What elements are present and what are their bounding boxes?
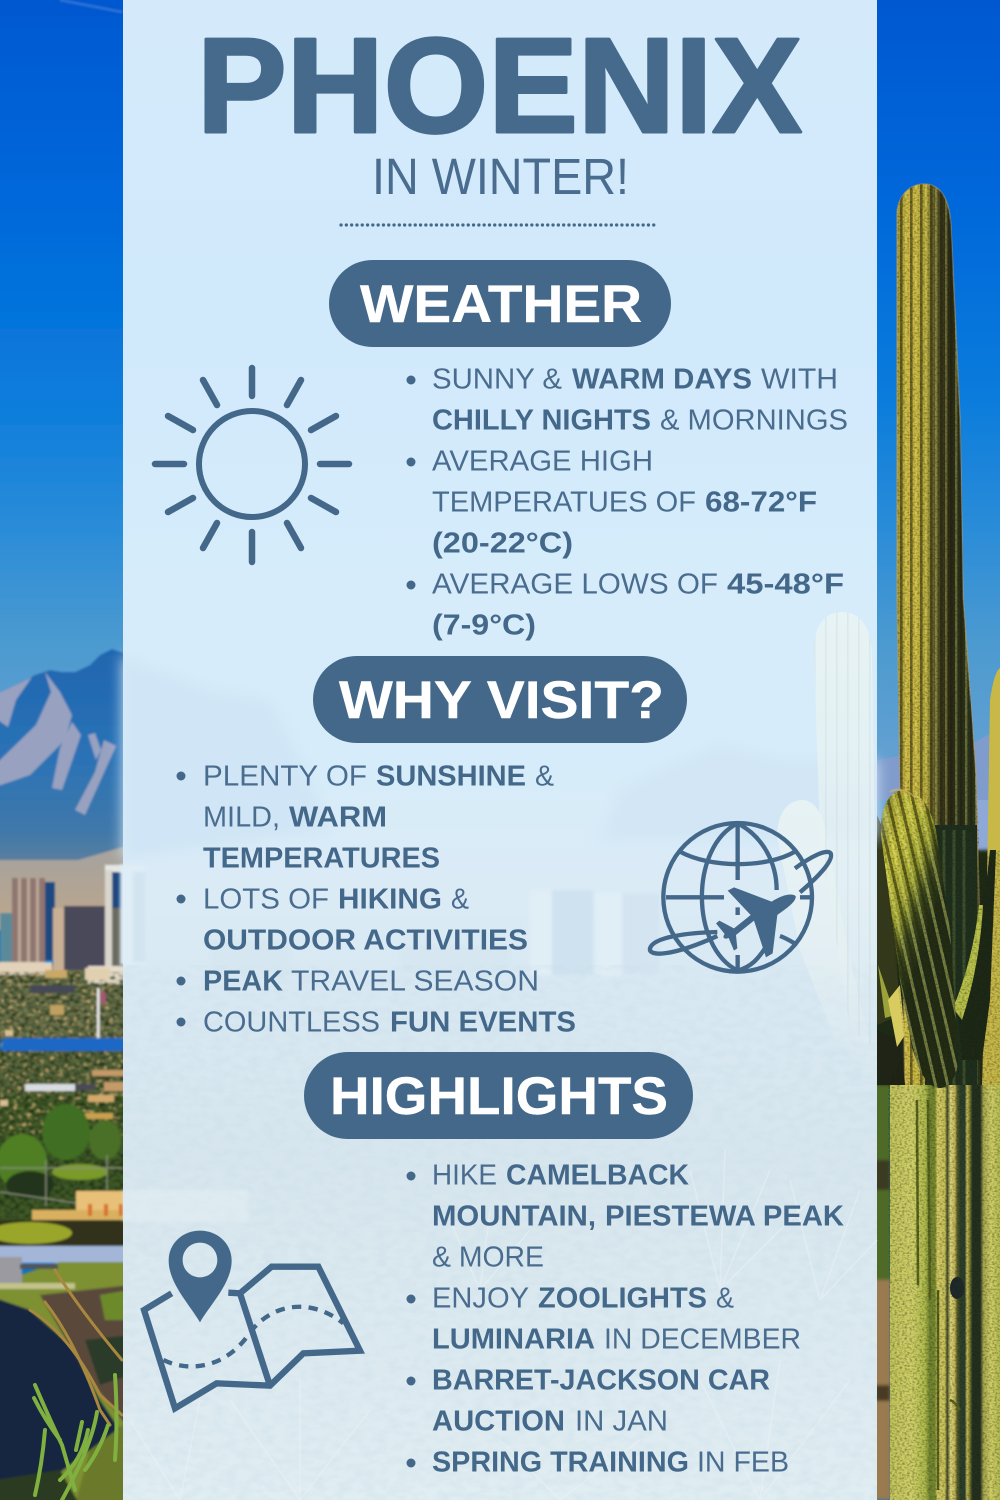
background photo: Phoenix skyline, left strip: [0, 0, 130, 1500]
subtitle: in winter: IN WINTER!: [372, 148, 629, 205]
why visit bullet list: TRAVEL SEASON: [291, 966, 539, 998]
right arm: [982, 668, 1000, 1085]
highlights bullet list: MOUNTAIN,: [432, 1200, 596, 1232]
faint city and hillside mottling: [123, 965, 877, 1500]
why visit bullet list: FUN EVENTS: [390, 1006, 576, 1038]
main saguaro column: [897, 184, 984, 1100]
highlights bullet list: [406, 1160, 844, 1478]
why visit bullet list: LOTS OF: [203, 884, 329, 916]
city texture: [0, 972, 130, 1222]
weather bullet list: TEMPERATUES OF: [432, 486, 696, 518]
heading pill: why visit: [313, 656, 687, 743]
skyline towers: [0, 865, 130, 984]
highlights bullet list: IN DECEMBER: [604, 1324, 801, 1356]
lower trunk: [890, 1085, 1000, 1500]
title: PHOENIX: PHOENIX: [197, 10, 802, 161]
weather bullet list: & MORNINGS: [660, 404, 848, 436]
left small arm: [877, 815, 900, 1025]
branches and plants: [30, 1270, 122, 1500]
highlights bullet list: AUCTION: [432, 1406, 565, 1438]
icon: sun: [155, 368, 349, 562]
flag pole: [97, 988, 100, 1046]
highlights bullet list: BARRET-JACKSON CAR: [432, 1364, 770, 1396]
why visit bullet list: SUNSHINE: [376, 760, 526, 792]
weather bullet list: 45-48°F: [727, 568, 844, 600]
ground: [877, 848, 988, 1500]
weather bullet list: AVERAGE HIGH: [432, 446, 653, 478]
highlights bullet list: IN JAN: [575, 1406, 668, 1438]
why visit bullet list: &: [535, 760, 554, 792]
highlights bullet list: IN FEB: [697, 1446, 789, 1478]
weather bullet list: [406, 364, 848, 642]
icon: globe with airplane: [650, 823, 831, 972]
light roofs: [25, 1084, 75, 1091]
trees: [42, 1104, 90, 1160]
faint mountains: [123, 655, 330, 860]
spine texture: [877, 184, 1000, 1500]
dotted divider: [341, 223, 656, 227]
distant mountains: [877, 756, 900, 800]
highlights bullet list: ZOOLIGHTS: [538, 1282, 707, 1314]
heading pill: weather: WEATHER: [360, 275, 642, 334]
ghosted scene inside panel: [120, 612, 877, 1500]
heading pill: highlights: [304, 1052, 693, 1139]
weather bullet list: AVERAGE LOWS OF: [432, 568, 718, 600]
highlights bullet list: HIKE: [432, 1160, 497, 1192]
icon: map with location pin: [144, 1231, 360, 1408]
why visit bullet list: PEAK: [203, 966, 283, 998]
weather bullet list: CHILLY NIGHTS: [432, 404, 651, 436]
airplane: [716, 887, 796, 957]
highlights bullet list: CAMELBACK: [506, 1160, 689, 1192]
utility poles: [0, 1155, 122, 1206]
why visit bullet list: OUTDOOR ACTIVITIES: [203, 924, 528, 956]
why visit bullet list: MILD,: [203, 802, 280, 834]
background photo: saguaro cactus, right strip: [870, 0, 1000, 1500]
why visit bullet list: HIKING: [338, 884, 442, 916]
hillside: [0, 1262, 130, 1500]
heading pill: why visit: WHY VISIT?: [339, 671, 664, 730]
why visit bullet list: COUNTLESS: [203, 1006, 380, 1038]
why visit bullet list: PLENTY OF: [203, 760, 367, 792]
small city blocks: [30, 985, 75, 993]
rib ends on lower trunk: [917, 1100, 960, 1490]
desert haze band: [0, 860, 130, 930]
weather bullet list: WARM DAYS: [572, 364, 752, 396]
heading pill: highlights: HIGHLIGHTS: [330, 1067, 668, 1126]
highlights bullet list: PIESTEWA PEAK: [605, 1200, 844, 1232]
weather bullet list: (7-9°C): [432, 610, 536, 642]
highlights bullet list: SPRING TRAINING: [432, 1446, 689, 1478]
mountain: [0, 649, 130, 862]
highlights bullet list: ENJOY: [432, 1282, 529, 1314]
faint skyline: [120, 865, 660, 975]
weather bullet list: SUNNY &: [432, 364, 562, 396]
drooping saguaro arm: [881, 790, 958, 1088]
sky: [877, 0, 1000, 880]
sky: [0, 0, 123, 694]
highlights bullet list: & MORE: [432, 1242, 544, 1274]
tan building: [74, 1188, 123, 1212]
why visit bullet list: WARM: [289, 802, 387, 834]
faint ghost saguaros: [777, 800, 877, 1085]
weather bullet list: (20-22°C): [432, 528, 573, 560]
faint plant streaks: [130, 1150, 877, 1500]
highlights bullet list: LUMINARIA: [432, 1324, 595, 1356]
city base: [0, 965, 130, 1040]
highlights bullet list: &: [716, 1282, 734, 1314]
why visit bullet list: &: [451, 884, 469, 916]
weather bullet list: 68-72°F: [705, 486, 817, 518]
shaded lower column behind arm: [925, 825, 977, 1095]
blue stripe: [3, 1038, 130, 1051]
pale stripe: [0, 1246, 130, 1263]
why visit bullet list: TEMPERATURES: [203, 842, 440, 874]
heading pill: weather: [329, 260, 671, 347]
why visit bullet list: [176, 760, 576, 1038]
weather bullet list: WITH: [761, 364, 838, 396]
centre panel: [123, 0, 877, 1500]
